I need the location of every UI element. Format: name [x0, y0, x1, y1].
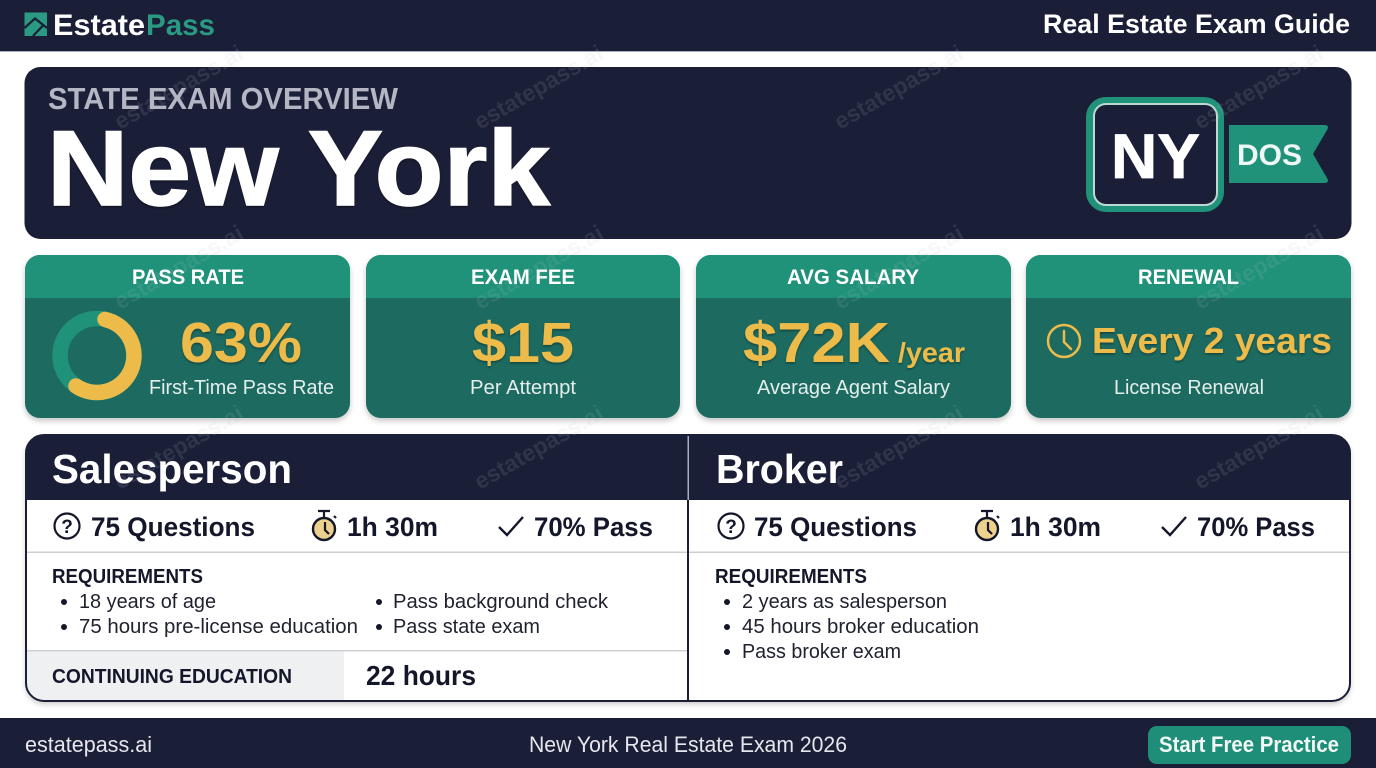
icon: clock — [1048, 325, 1080, 357]
caption: Per Attempt — [470, 377, 576, 399]
logo wordmark: Pass — [146, 9, 215, 42]
DOS ribbon — [1229, 125, 1328, 183]
icon: question — [54, 514, 80, 538]
DOS ribbon: DOS — [1237, 139, 1302, 172]
requirements: Pass background check — [393, 591, 609, 613]
state badge — [1090, 101, 1220, 208]
requirements — [715, 566, 979, 663]
watermarks: estatepass.ai — [110, 40, 248, 134]
icon: question: ? — [61, 517, 73, 538]
stats row — [54, 511, 653, 542]
hero panel — [24, 67, 1352, 239]
state badge: NY — [1111, 122, 1200, 192]
stat card: exam fee — [366, 255, 680, 418]
donut chart 63% — [60, 318, 134, 393]
value: Every 2 years — [1092, 320, 1332, 361]
duration: 1h 30m — [347, 512, 438, 542]
eyebrow heading: STATE EXAM OVERVIEW — [48, 81, 399, 116]
requirements: Pass broker exam — [742, 641, 901, 663]
header title: Real Estate Exam Guide — [1043, 9, 1350, 39]
state name: New York — [47, 108, 551, 228]
watermarks: estatepass.ai — [1190, 40, 1328, 134]
footer title: New York Real Estate Exam 2026 — [529, 732, 847, 757]
icon: stopwatch — [313, 511, 336, 540]
column: broker — [715, 446, 1315, 663]
value: $15 — [472, 311, 574, 375]
value unit: /year — [898, 337, 965, 368]
passing score: 70% Pass — [1197, 512, 1315, 542]
logo wordmark — [53, 9, 215, 42]
duration: 1h 30m — [1010, 512, 1101, 542]
footer site: estatepass.ai — [25, 732, 152, 757]
logo wordmark: Estate — [53, 9, 145, 42]
card label: EXAM FEE — [471, 266, 575, 289]
watermarks: estatepass.ai — [1190, 220, 1328, 314]
call to action button — [1148, 726, 1351, 764]
caption: Average Agent Salary — [757, 377, 950, 399]
column heading: Broker — [716, 446, 843, 492]
footer bar — [0, 718, 1376, 768]
watermarks — [110, 40, 1328, 494]
card label: PASS RATE — [132, 266, 244, 289]
top header bar — [0, 0, 1376, 52]
license comparison panel — [26, 435, 1350, 701]
question count: 75 Questions — [91, 512, 255, 542]
requirements: 45 hours broker education — [742, 616, 979, 638]
stat card: pass rate — [25, 255, 350, 418]
column: salesperson — [27, 446, 653, 700]
passing score: 70% Pass — [534, 512, 653, 542]
value: $72K — [743, 311, 890, 375]
watermarks: estatepass.ai — [110, 220, 248, 314]
icon: question — [718, 514, 744, 538]
icon: check — [1162, 517, 1186, 535]
requirements — [52, 566, 609, 638]
question count: 75 Questions — [754, 512, 917, 542]
watermarks: estatepass.ai — [830, 40, 968, 134]
watermarks: estatepass.ai — [110, 400, 248, 494]
watermarks: estatepass.ai — [1190, 400, 1328, 494]
watermarks: estatepass.ai — [830, 400, 968, 494]
stat card: renewal — [1026, 255, 1351, 418]
card label: AVG SALARY — [787, 266, 919, 289]
column heading: Salesperson — [52, 446, 292, 492]
value: 63% — [180, 311, 302, 375]
continuing education row: 22 hours — [366, 660, 476, 691]
icon: stopwatch — [976, 511, 999, 540]
watermarks: estatepass.ai — [830, 220, 968, 314]
requirements: 75 hours pre-license education — [79, 616, 358, 638]
caption: First-Time Pass Rate — [149, 377, 334, 399]
requirements: REQUIREMENTS — [52, 566, 203, 588]
caption: License Renewal — [1114, 377, 1264, 399]
watermarks: estatepass.ai — [470, 40, 608, 134]
requirements: 18 years of age — [79, 591, 216, 613]
stat card: average salary — [696, 255, 1011, 418]
icon: check — [499, 517, 523, 535]
continuing education row — [27, 651, 476, 700]
requirements: 2 years as salesperson — [742, 591, 947, 613]
card label: RENEWAL — [1138, 266, 1239, 289]
icon: question: ? — [725, 517, 737, 538]
stats row — [718, 511, 1315, 542]
continuing education row: CONTINUING EDUCATION — [52, 666, 292, 688]
watermarks: estatepass.ai — [470, 220, 608, 314]
requirements: REQUIREMENTS — [715, 566, 867, 588]
requirements: Pass state exam — [393, 616, 540, 638]
watermarks: estatepass.ai — [470, 400, 608, 494]
icon: logo house — [24, 12, 47, 36]
call to action button: Start Free Practice — [1159, 732, 1339, 757]
